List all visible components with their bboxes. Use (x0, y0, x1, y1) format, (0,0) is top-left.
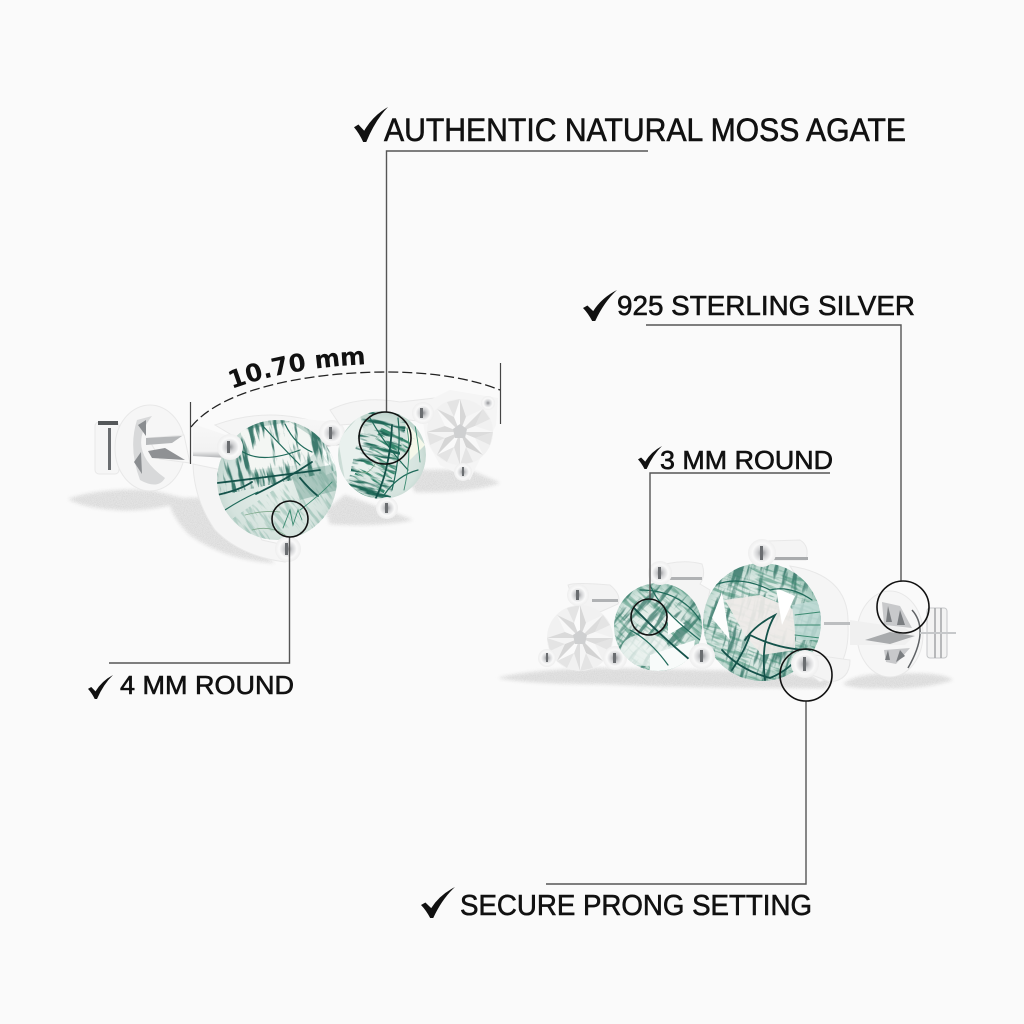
earring back nut (95, 405, 190, 491)
label: AUTHENTIC NATURAL MOSS AGATE (384, 112, 906, 148)
dimension: 10.70 mm (190, 350, 502, 464)
icon: check mark (354, 107, 388, 142)
leader line (109, 537, 290, 663)
label: 925 STERLING SILVER (617, 290, 915, 321)
icon: check mark (583, 290, 617, 321)
small moss agate setting (330, 398, 435, 425)
right earring (498, 539, 956, 702)
label: 4 MM ROUND (120, 672, 294, 700)
right diamond (538, 584, 627, 671)
callout: 4 mm round (88, 501, 308, 700)
big moss agate setting (193, 415, 340, 562)
right big moss agate stone (703, 564, 821, 681)
label: SECURE PRONG SETTING (460, 890, 812, 922)
ring marker (877, 581, 929, 633)
leader line (546, 701, 806, 884)
small moss agate stone (338, 411, 426, 499)
callout: authentic natural moss agate (354, 107, 906, 464)
callout: secure prong setting (421, 649, 832, 922)
callout: 3 mm round (631, 446, 833, 635)
dimension label: 10.70 mm (228, 350, 364, 388)
small stone prongs (376, 402, 434, 519)
right big setting (768, 540, 850, 682)
right prongs (648, 539, 819, 678)
ring marker (631, 599, 667, 635)
left earring (70, 396, 498, 564)
leader line (650, 473, 830, 598)
ring marker (272, 501, 308, 537)
icon: check mark (88, 675, 113, 699)
right back post and nut (850, 591, 956, 677)
icon: check mark (638, 446, 662, 469)
right small setting (652, 562, 710, 640)
ring marker (359, 412, 411, 464)
dimension ticks (190, 363, 500, 464)
label: 3 MM ROUND (660, 447, 833, 475)
diamond (420, 390, 498, 481)
left earring shadows (68, 470, 500, 563)
big moss agate stone (217, 420, 337, 540)
right earring shadows (498, 668, 953, 688)
leader line (386, 151, 648, 412)
ring marker (780, 649, 832, 701)
big stone prongs (217, 420, 345, 562)
right small moss agate stone (614, 583, 702, 671)
dashed arc (191, 372, 500, 427)
icon: check mark (421, 887, 455, 918)
leader line (646, 325, 901, 581)
callout: 925 sterling silver (583, 290, 929, 633)
